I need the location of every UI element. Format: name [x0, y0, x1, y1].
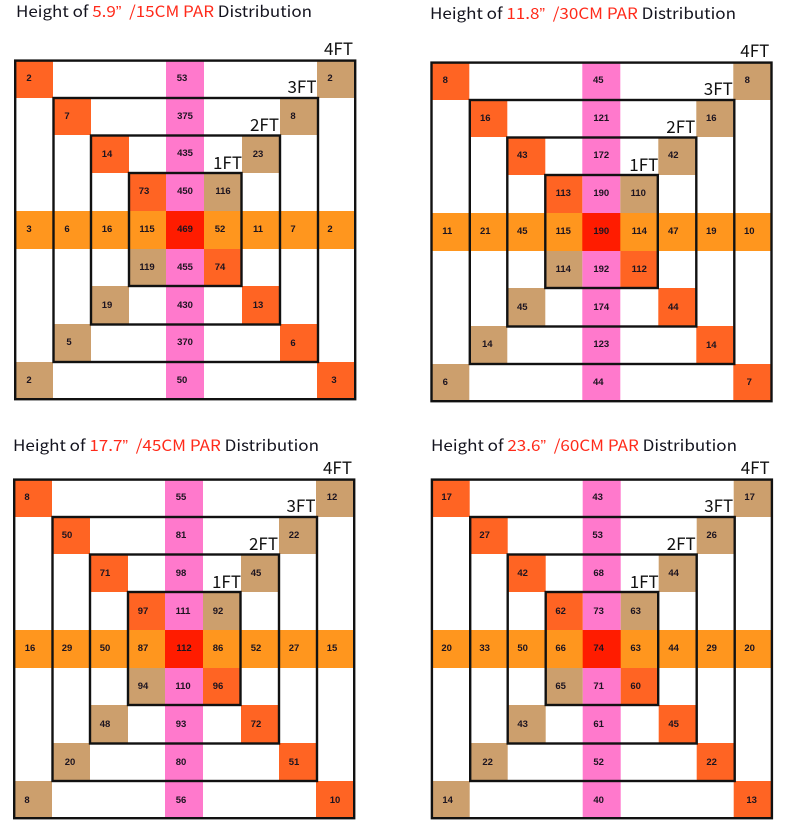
- tan diagonal cells: [15, 480, 354, 818]
- PAR values: 17: [744, 492, 755, 503]
- PAR values: 63: [630, 606, 641, 617]
- tan diagonal cells: [433, 480, 772, 818]
- center row: [16, 211, 355, 249]
- PAR values: 94: [138, 681, 149, 692]
- orange-red diagonal cells: [432, 63, 771, 401]
- PAR values: 6: [443, 377, 448, 388]
- PAR values: 6: [290, 338, 296, 349]
- PAR values: 16: [706, 113, 717, 124]
- PAR values: 123: [593, 339, 609, 350]
- PAR values: 450: [177, 186, 193, 197]
- PAR values: 43: [592, 492, 603, 503]
- PAR values: 51: [289, 757, 300, 768]
- PAR values: 62: [555, 606, 566, 617]
- PAR values: 6: [64, 224, 70, 235]
- PAR values: 33: [479, 643, 490, 654]
- PAR values: 29: [706, 643, 717, 654]
- PAR values: 21: [480, 226, 491, 237]
- PAR values: 43: [517, 719, 528, 730]
- PAR values: 63: [630, 643, 641, 654]
- title: 23.6 inch / 60CM: Height of 23.6” /60CM PAR Distribution: [431, 434, 737, 456]
- PAR values: 8: [24, 795, 30, 806]
- title: 17.7 inch / 45CM: Height of 17.7” /45CM PAR Distribution: [13, 434, 319, 456]
- PAR values: 81: [176, 530, 187, 541]
- PAR values: 93: [176, 719, 186, 730]
- PAR values: 50: [177, 375, 187, 386]
- PAR values: 2: [26, 73, 32, 84]
- PAR values: 5: [66, 337, 72, 348]
- PAR values: 7: [747, 377, 752, 388]
- size labels: 3FT: [288, 73, 317, 98]
- PAR values: 56: [176, 795, 186, 806]
- center cell: [583, 630, 621, 668]
- tan diagonal cells: [432, 63, 771, 401]
- PAR values: 80: [176, 757, 186, 768]
- PAR values: 43: [517, 150, 528, 161]
- PAR values: 114: [556, 264, 572, 275]
- center column: [165, 480, 203, 818]
- PAR values: 74: [215, 262, 226, 273]
- PAR values: 71: [593, 681, 605, 692]
- PAR values: 113: [556, 188, 571, 199]
- PAR values: 52: [251, 643, 261, 654]
- PAR values: 45: [517, 226, 528, 237]
- PAR values: 50: [62, 530, 72, 541]
- PAR values: 65: [555, 681, 567, 692]
- PAR values: 96: [213, 681, 223, 692]
- size labels: [212, 454, 352, 593]
- PAR values: 66: [555, 643, 566, 654]
- size frames: [15, 61, 355, 399]
- PAR values: 73: [139, 186, 149, 197]
- size labels: 1FT: [629, 151, 658, 176]
- PAR values: 44: [593, 377, 604, 388]
- PAR values: 13: [746, 795, 757, 806]
- PAR values: 370: [177, 337, 193, 348]
- PAR values: 29: [62, 643, 72, 654]
- center row: [15, 630, 354, 668]
- PAR values: 19: [102, 300, 112, 311]
- panel: PAR grid at 30CM: [432, 37, 772, 401]
- PAR values: 116: [215, 186, 231, 197]
- size labels: 2FT: [249, 530, 278, 555]
- size labels: [213, 35, 353, 174]
- PAR values: 13: [253, 300, 263, 311]
- PAR values: 110: [175, 681, 191, 692]
- PAR values: 16: [102, 224, 112, 235]
- PAR values: 11: [442, 226, 453, 237]
- PAR values: 2: [327, 224, 333, 235]
- PAR values: 7: [64, 111, 70, 122]
- center cell: [165, 630, 203, 668]
- PAR values: 121: [593, 113, 610, 124]
- size labels: 1FT: [212, 568, 241, 593]
- PAR values: 112: [632, 264, 647, 275]
- size labels: 3FT: [286, 492, 316, 517]
- size labels: 2FT: [250, 111, 279, 136]
- center column: [166, 61, 204, 399]
- size labels: 1FT: [213, 149, 242, 174]
- PAR values: 47: [668, 226, 679, 237]
- panel: PAR grid at 15CM: [15, 35, 355, 399]
- PAR values: 86: [213, 643, 223, 654]
- PAR values: 2: [26, 375, 32, 386]
- PAR values: 87: [138, 643, 148, 654]
- PAR values: [24, 492, 340, 806]
- PAR values: 44: [668, 302, 679, 313]
- center column: [583, 480, 621, 818]
- PAR values: 98: [176, 568, 186, 579]
- PAR values: 61: [593, 719, 605, 730]
- PAR values: 27: [479, 530, 490, 541]
- PAR values: 14: [102, 149, 113, 160]
- PAR values: 14: [442, 795, 454, 806]
- tan diagonal cells: [16, 61, 355, 399]
- PAR values: 8: [443, 75, 448, 86]
- PAR values: 110: [631, 188, 646, 199]
- PAR values: 111: [176, 606, 191, 617]
- PAR values: 119: [139, 262, 155, 273]
- PAR values: 7: [290, 224, 296, 235]
- PAR values: 114: [632, 226, 648, 237]
- PAR values: 50: [517, 643, 528, 654]
- PAR values: 16: [25, 643, 35, 654]
- size labels: 3FT: [704, 492, 733, 517]
- PAR values: 60: [630, 681, 641, 692]
- PAR values: 12: [327, 492, 337, 503]
- PAR values: 469: [177, 224, 193, 235]
- center cell: [166, 211, 204, 249]
- PAR values: 22: [706, 757, 717, 768]
- panel: PAR grid at 45CM: [14, 454, 354, 818]
- PAR values: 42: [668, 150, 679, 161]
- PAR values: 115: [556, 226, 572, 237]
- PAR values: 172: [593, 150, 609, 161]
- PAR values: 112: [176, 643, 192, 654]
- size labels: 4FT: [741, 454, 770, 479]
- PAR values: 22: [289, 530, 299, 541]
- center row: [432, 213, 771, 251]
- PAR values: 3: [26, 224, 32, 235]
- PAR values: 8: [290, 111, 296, 122]
- size labels: 1FT: [630, 568, 659, 593]
- PAR values: 44: [668, 643, 680, 654]
- PAR values: 2: [327, 73, 333, 84]
- PAR values: 16: [480, 113, 491, 124]
- PAR values: 22: [482, 757, 493, 768]
- PAR values: 3: [331, 375, 337, 386]
- orange-red diagonal cells: [15, 480, 354, 818]
- size labels: 4FT: [324, 35, 353, 60]
- PAR values: 72: [251, 719, 261, 730]
- PAR values: 48: [100, 719, 110, 730]
- PAR values: 45: [668, 719, 680, 730]
- PAR values: 45: [517, 302, 528, 313]
- PAR values: 375: [177, 111, 194, 122]
- title: 11.8 inch / 30CM: Height of 11.8” /30CM PAR Distribution: [430, 2, 736, 24]
- PAR values: [442, 75, 755, 388]
- PAR values: 71: [100, 568, 111, 579]
- PAR values: 44: [668, 568, 680, 579]
- PAR values: 190: [593, 188, 609, 199]
- PAR values: 40: [593, 795, 604, 806]
- PAR values: 20: [65, 757, 75, 768]
- PAR values: 55: [176, 492, 187, 503]
- PAR values: 42: [517, 568, 528, 579]
- size labels: 3FT: [704, 75, 733, 100]
- PAR values: 11: [253, 224, 264, 235]
- size labels: 4FT: [323, 454, 352, 479]
- PAR values: 192: [593, 264, 609, 275]
- size labels: 4FT: [740, 37, 769, 62]
- PAR values: 14: [482, 339, 493, 350]
- size frames: [432, 480, 772, 818]
- panel: PAR grid at 60CM: [432, 454, 772, 818]
- PAR values: 27: [289, 643, 299, 654]
- PAR values: 8: [745, 75, 750, 86]
- PAR values: 174: [593, 302, 610, 313]
- PAR values: 92: [213, 606, 223, 617]
- PAR values: 8: [24, 492, 30, 503]
- PAR values: 97: [138, 606, 148, 617]
- PAR values: 190: [593, 226, 609, 237]
- size frames: [432, 63, 772, 401]
- PAR values: 435: [177, 148, 194, 159]
- size labels: [629, 37, 769, 176]
- PAR values: 23: [253, 149, 263, 160]
- PAR values: 50: [100, 643, 110, 654]
- PAR values: 52: [215, 224, 225, 235]
- center row: [433, 630, 772, 668]
- PAR values: 14: [706, 340, 717, 351]
- PAR values: 455: [177, 262, 194, 273]
- center cell: [582, 213, 620, 251]
- PAR values: 53: [592, 530, 603, 541]
- PAR values: 10: [744, 226, 755, 237]
- PAR values: 430: [177, 300, 193, 311]
- size labels: 2FT: [666, 113, 695, 138]
- PAR values: [26, 73, 337, 386]
- orange-red diagonal cells: [16, 61, 355, 399]
- PAR values: 20: [744, 643, 755, 654]
- PAR values: 45: [251, 568, 262, 579]
- title: 5.9 inch / 15CM: Height of 5.9” /15CM PAR Distribution: [16, 0, 312, 22]
- PAR values: 19: [706, 226, 717, 237]
- PAR values: 45: [593, 75, 604, 86]
- size labels: [630, 454, 770, 593]
- PAR values: [441, 492, 757, 806]
- PAR values: 20: [441, 643, 452, 654]
- PAR values: 68: [593, 568, 604, 579]
- PAR values: 53: [177, 73, 187, 84]
- size labels: 2FT: [667, 530, 696, 555]
- PAR values: 73: [593, 606, 604, 617]
- PAR values: 115: [139, 224, 155, 235]
- PAR values: 15: [327, 643, 338, 654]
- PAR values: 74: [593, 643, 605, 654]
- center column: [582, 63, 620, 401]
- size frames: [14, 480, 354, 818]
- PAR values: 26: [706, 530, 717, 541]
- PAR values: 52: [593, 757, 604, 768]
- orange-red diagonal cells: [433, 480, 772, 818]
- PAR values: 17: [441, 492, 452, 503]
- PAR values: 10: [330, 795, 340, 806]
